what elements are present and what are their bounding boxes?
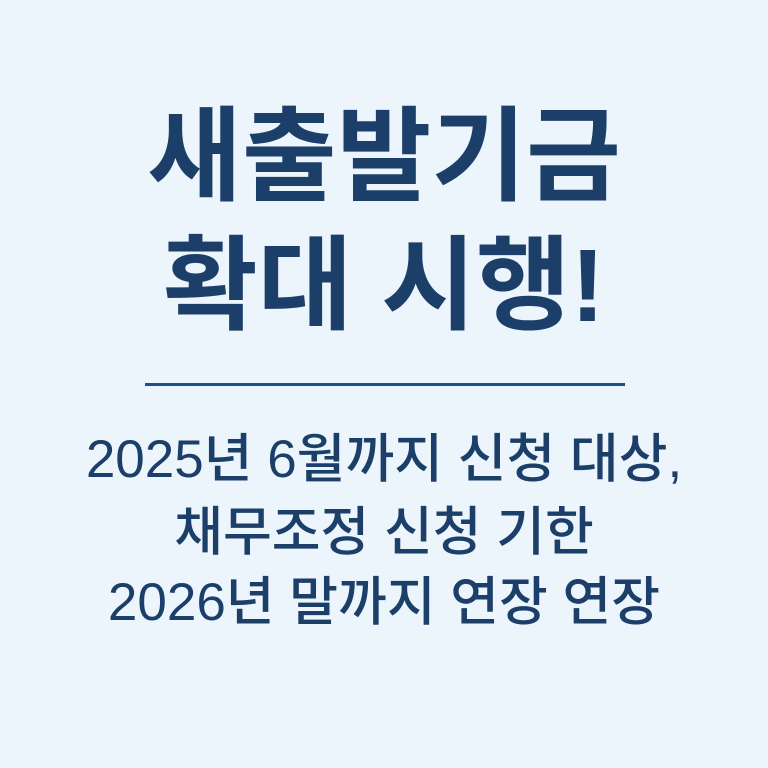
title line 1: 새출발기금 [147,99,621,214]
divider line [145,383,625,386]
subtitle line 2: 채무조정 신청 기한 [174,503,594,562]
title line 2: 확대 시행! [163,228,605,343]
title [147,99,621,343]
subtitle text block [86,430,682,632]
subtitle line 3: 2026년 말까지 연장 연장 [108,573,660,632]
subtitle line 1: 2025년 6월까지 신청 대상, [86,430,682,489]
